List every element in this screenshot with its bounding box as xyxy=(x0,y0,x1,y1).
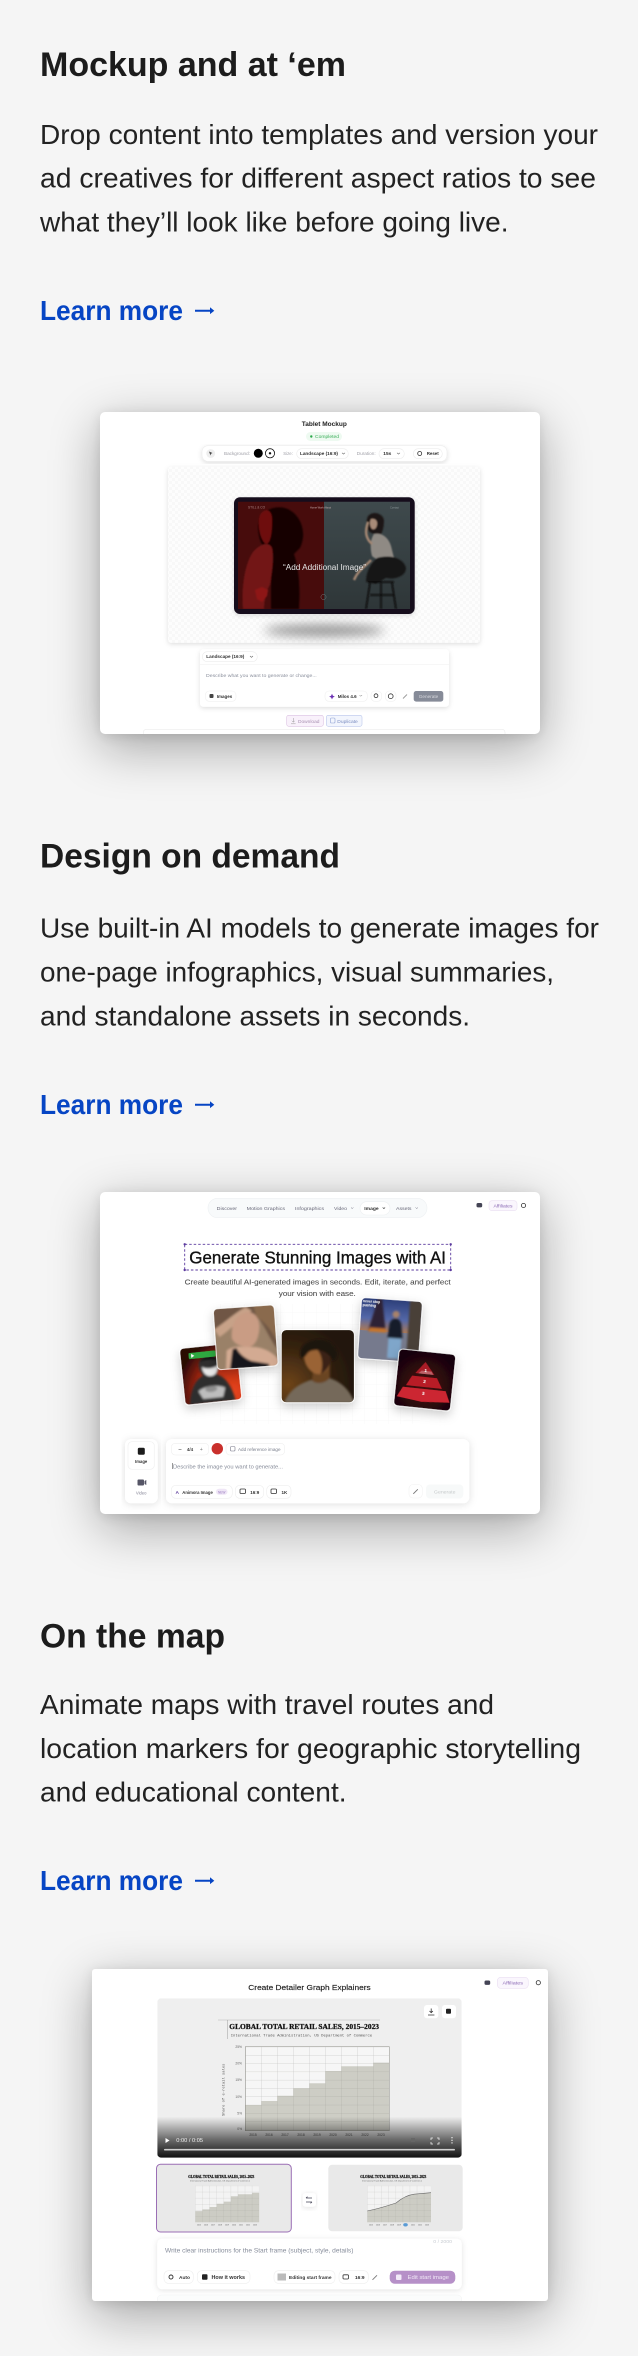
subtitle: Create beautiful AI-generated images in seconds. Edit, iterate, and perfect xyxy=(185,1278,452,1287)
side tabs: image and video: Video xyxy=(136,1490,147,1495)
image: phone thumbnail xyxy=(179,1342,243,1406)
toolbar xyxy=(202,446,447,461)
step area chart: 25% xyxy=(235,2045,242,2049)
prompt panel: A xyxy=(176,1490,180,1496)
top right controls xyxy=(476,1201,526,1211)
step area chart: 2023 xyxy=(377,2133,385,2137)
step area chart: 0% xyxy=(237,2127,242,2131)
link: learn more: Learn more xyxy=(40,1089,183,1120)
prompt box: Generate xyxy=(419,694,439,700)
link: learn more: Learn more xyxy=(40,1865,183,1896)
navigation bar: Discover xyxy=(217,1206,237,1212)
site name on screen: STILL & CO xyxy=(248,506,266,510)
prompt box xyxy=(200,649,449,707)
button: duplicate: Duplicate xyxy=(337,719,358,725)
prompt panel: Generate xyxy=(434,1490,456,1494)
image: red pyramid xyxy=(393,1348,457,1412)
step area chart: 20% xyxy=(235,2062,242,2066)
heading: graph explainers: Create Detailer Graph Explainers xyxy=(248,1983,371,1992)
step area chart: 2019 xyxy=(313,2133,321,2137)
status pill: completed: Completed xyxy=(315,434,339,440)
tablet shadow xyxy=(264,624,384,636)
text block: mockup description: what they’ll look like before going live. xyxy=(39,207,508,238)
text block: mockup description: Drop content into templates and version your xyxy=(40,119,598,150)
prompt box: Landscape (16:9) xyxy=(206,654,245,660)
image: skater at eiffel tower: pushing xyxy=(363,1303,376,1308)
button: download: Download xyxy=(298,719,320,725)
prompt box: 0 / 2000 xyxy=(433,2239,453,2244)
video player xyxy=(157,1998,462,2158)
prompt box: Images xyxy=(217,694,233,700)
seated woman xyxy=(366,513,384,536)
prompt panel: 16:9 xyxy=(250,1490,260,1495)
chart title: International Trade Administration, US Department of Commerce xyxy=(231,2034,373,2038)
start frame thumbnail: 2022 xyxy=(246,2224,250,2226)
end frame thumbnail: 2019 xyxy=(397,2224,401,2226)
toolbar: 15s xyxy=(383,451,392,457)
step area chart xyxy=(222,2045,389,2137)
section: design on demand xyxy=(40,838,599,1120)
chart title xyxy=(218,2020,380,2039)
prompt panel: + xyxy=(200,1447,203,1453)
start frame thumbnail: 2023 xyxy=(253,2224,257,2226)
step area chart: 2015 xyxy=(249,2133,257,2137)
step area chart: 10% xyxy=(235,2095,242,2099)
toolbar: Duration: xyxy=(357,451,376,457)
button: download xyxy=(287,715,323,726)
text block: design description: Use built-in AI models to generate images for xyxy=(40,913,599,944)
heading with dashed selection frame xyxy=(184,1243,452,1271)
swap frames button xyxy=(303,2193,316,2207)
section: on the map xyxy=(40,1618,581,1896)
status pill: completed xyxy=(306,432,342,441)
video action buttons xyxy=(424,2005,456,2018)
text block: map description xyxy=(40,1689,581,1808)
start frame thumbnail: 2018 xyxy=(218,2224,222,2226)
navigation bar: Infographics xyxy=(295,1206,325,1212)
navigation bar: Assets xyxy=(396,1206,412,1212)
start frame thumbnail: 2017 xyxy=(211,2224,215,2226)
subtitle xyxy=(185,1278,452,1298)
side tabs: image and video xyxy=(125,1439,158,1503)
end frame thumbnail: International Trade Administration, US Department of Commerce xyxy=(362,2180,423,2182)
start frame thumbnail: GLOBAL TOTAL RETAIL SALES, 2015–2023 xyxy=(188,2175,254,2179)
step area chart: 2016 xyxy=(265,2133,273,2137)
screen caption: “Add Additional Image” xyxy=(283,563,366,572)
image: man portrait xyxy=(281,1329,355,1403)
prompt panel: − xyxy=(178,1447,182,1452)
image: red pyramid: 3 xyxy=(422,1391,425,1396)
start frame thumbnail: International Trade Administration, US Department of Commerce xyxy=(190,2180,251,2182)
end frame thumbnail xyxy=(328,2165,463,2231)
text block: map description: location markers for geographic storytelling xyxy=(40,1733,581,1764)
next panel edge xyxy=(143,729,505,739)
heading: tablet mockup: Tablet Mockup xyxy=(302,421,347,428)
tablet device: Home Work About xyxy=(310,506,331,510)
prompt box: Auto xyxy=(179,2275,190,2281)
text block: design description: and standalone assets in seconds. xyxy=(40,1001,470,1032)
image: red pyramid: 2 xyxy=(423,1379,427,1384)
toolbar: Reset xyxy=(427,451,439,457)
button: duplicate xyxy=(326,715,362,726)
red portrait xyxy=(258,507,303,609)
top right controls: Affiliates xyxy=(502,1980,523,1985)
tablet device: Contact xyxy=(390,506,399,510)
step area chart: Share of e-retail sales xyxy=(222,2064,226,2116)
chart title: GLOBAL TOTAL RETAIL SALES, 2015–2023 xyxy=(229,2024,380,2031)
start frame thumbnail: 2019 xyxy=(225,2224,229,2226)
step area chart: 2018 xyxy=(297,2133,305,2137)
end frame thumbnail: 2021 xyxy=(411,2224,415,2226)
link: learn more: Learn more xyxy=(40,295,183,326)
navigation bar: Image xyxy=(364,1206,379,1212)
end frame thumbnail: GLOBAL TOTAL RETAIL SALES, 2015–2023 xyxy=(360,2175,426,2179)
prompt panel: 1K xyxy=(282,1490,288,1495)
navigation bar: Video xyxy=(334,1206,347,1212)
start frame thumbnail: 2020 xyxy=(232,2224,236,2226)
prompt panel: Describe the image you want to generate... xyxy=(173,1464,283,1470)
canvas with checker background xyxy=(168,467,480,643)
end frame thumbnail: 2016 xyxy=(376,2224,380,2226)
start frame thumbnail: 2016 xyxy=(204,2224,208,2226)
toolbar: Landscape (16:9) xyxy=(300,451,338,457)
text block: design description xyxy=(40,913,599,1032)
prompt box: Editing start frame xyxy=(289,2275,332,2280)
prompt panel: NEW xyxy=(218,1490,225,1494)
heading: design on demand: Design on demand xyxy=(40,838,340,876)
panel: tablet mockup screenshot xyxy=(100,412,540,734)
step area chart: 2022 xyxy=(361,2133,369,2137)
heading: on the map: On the map xyxy=(40,1618,225,1656)
heading: Mockup and at 'em: Mockup and at ‘em xyxy=(40,46,346,84)
toolbar: Background: xyxy=(224,451,250,457)
video controls: 0:00 / 0:05 xyxy=(176,2138,203,2144)
prompt box: 16:9 xyxy=(355,2275,365,2281)
panel: graph explainer screenshot xyxy=(92,1969,548,2301)
end frame thumbnail: 2017 xyxy=(383,2224,387,2226)
panel: image generator screenshot xyxy=(100,1192,540,1514)
text block: map description: and educational content. xyxy=(40,1777,347,1808)
top right controls xyxy=(484,1977,540,1988)
prompt box xyxy=(157,2239,462,2289)
text block: design description: one-page infographics, visual summaries, xyxy=(40,957,554,988)
step area chart: 2017 xyxy=(281,2133,289,2137)
end frame thumbnail: 2022 xyxy=(418,2224,422,2226)
navigation bar xyxy=(208,1198,427,1218)
prompt box: Edit start image xyxy=(408,2275,449,2281)
top right controls: Affiliates xyxy=(494,1203,512,1208)
section: mockup and at 'em xyxy=(39,46,598,326)
text block: mockup description xyxy=(39,119,598,238)
prompt box: Write clear instructions for the Start frame (subject, style, details) xyxy=(165,2248,353,2254)
prompt box: Describe what you want to generate or change... xyxy=(206,673,317,679)
prompt panel xyxy=(166,1439,469,1503)
prompt panel: 4/4 xyxy=(187,1447,194,1452)
image: woman portrait xyxy=(213,1304,279,1370)
start frame thumbnail: 2015 xyxy=(197,2224,201,2226)
step area chart: 2021 xyxy=(345,2133,353,2137)
tablet device xyxy=(234,497,415,614)
video controls xyxy=(164,2137,455,2150)
image: skater at eiffel tower xyxy=(357,1297,423,1363)
text block: mockup description: ad creatives for different aspect ratios to see xyxy=(40,163,596,194)
step area chart: 5% xyxy=(237,2112,242,2116)
end frame thumbnail: 2018 xyxy=(390,2224,394,2226)
start frame thumbnail xyxy=(156,2164,291,2232)
end frame thumbnail: 2015 xyxy=(369,2224,373,2226)
prompt panel: Animora Image xyxy=(182,1490,213,1495)
subtitle: your vision with ease. xyxy=(279,1289,356,1298)
side tabs: image and video: Image xyxy=(135,1459,148,1464)
text block: map description: Animate maps with travel routes and xyxy=(40,1689,494,1720)
next box edge xyxy=(157,2295,462,2307)
faint grid behind images xyxy=(220,1304,420,1424)
navigation bar: Motion Graphics xyxy=(247,1206,286,1212)
prompt panel: Add reference image xyxy=(238,1447,281,1452)
image: skater at eiffel tower: never stop xyxy=(363,1299,380,1304)
start frame thumbnail: 2021 xyxy=(239,2224,243,2226)
end frame thumbnail: 2023 xyxy=(425,2224,429,2226)
step area chart: 2020 xyxy=(329,2133,337,2137)
prompt box: Milos 4.6 xyxy=(338,694,357,700)
step area chart: 15% xyxy=(235,2078,242,2082)
toolbar: Size: xyxy=(283,451,293,457)
prompt box: How it works xyxy=(212,2275,245,2281)
image: red pyramid: 1 xyxy=(424,1368,428,1373)
heading with dashed selection frame: Generate Stunning Images with AI xyxy=(189,1248,446,1268)
